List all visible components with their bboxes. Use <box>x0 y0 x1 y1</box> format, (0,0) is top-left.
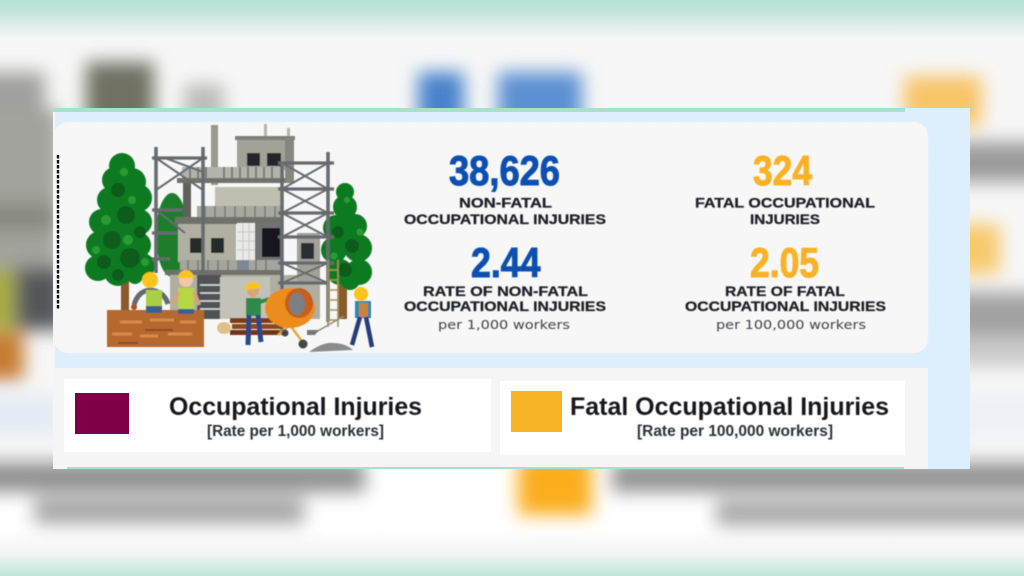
stat: fatal rate: OCCUPATIONAL INJURIES <box>685 298 886 314</box>
icon: worker four <box>307 287 372 347</box>
icon: building <box>165 124 320 319</box>
gravel pile <box>309 343 353 352</box>
illustration: construction site <box>85 124 372 352</box>
stat: non-fatal rate: 2.44 <box>471 239 541 286</box>
stat: non-fatal injuries count <box>404 147 606 227</box>
stat: fatal injuries count <box>695 147 876 227</box>
icon: worker three <box>245 282 269 345</box>
stat: fatal injuries count: INJURIES <box>750 211 820 227</box>
stat: non-fatal rate <box>404 239 606 332</box>
icon: scaffolding <box>152 147 334 335</box>
stat: fatal rate: per 100,000 workers <box>716 318 866 332</box>
stat: fatal rate: RATE OF FATAL <box>725 283 845 299</box>
stat: non-fatal rate: per 1,000 workers <box>438 318 570 332</box>
main panel <box>53 108 970 469</box>
stat: non-fatal injuries count: 38,626 <box>449 147 560 194</box>
legend item: fatal occupational injuries: [Rate per 100,000 workers] <box>637 423 833 440</box>
stat: fatal rate <box>685 239 886 332</box>
icon: left tree <box>85 153 155 313</box>
stat: non-fatal injuries count: NON-FATAL <box>459 194 553 210</box>
legend item: fatal occupational injuries <box>500 381 905 455</box>
icon: logs <box>217 318 281 335</box>
icon: right tree <box>321 183 372 319</box>
legend item: occupational injuries: Occupational Injuries <box>169 393 422 421</box>
legend item: occupational injuries <box>64 379 491 452</box>
stat: fatal injuries count: 324 <box>753 147 813 194</box>
legend item: occupational injuries: [Rate per 1,000 workers] <box>207 423 384 440</box>
icon: worker one <box>131 272 168 313</box>
icon: ladder <box>328 260 338 327</box>
background tree behind building <box>156 193 188 277</box>
stat: fatal rate: 2.05 <box>750 239 819 286</box>
stat: non-fatal rate: RATE OF NON-FATAL <box>423 283 589 299</box>
icon: cement mixer <box>265 288 315 348</box>
dashed side rule <box>57 155 59 310</box>
icon: brick wall <box>107 310 204 347</box>
legend item: fatal occupational injuries: Fatal Occupational Injuries <box>570 393 889 421</box>
panel: statistics card <box>54 122 928 353</box>
stat: non-fatal rate: OCCUPATIONAL INJURIES <box>404 298 606 314</box>
icon: worker two <box>173 270 199 314</box>
stat: non-fatal injuries count: OCCUPATIONAL INJURIES <box>404 211 606 227</box>
panel: legend <box>54 368 928 469</box>
stat: fatal injuries count: FATAL OCCUPATIONAL <box>695 194 876 210</box>
